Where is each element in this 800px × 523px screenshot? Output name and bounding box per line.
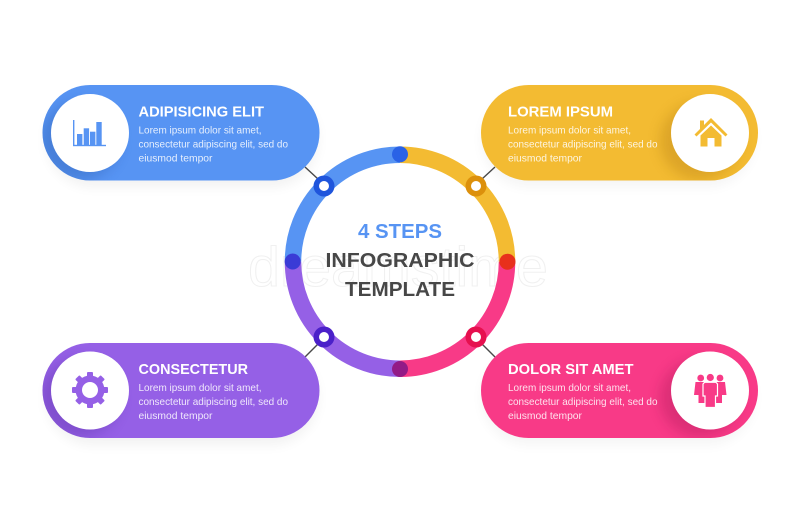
ring node: bottom left [314,326,334,348]
panel text: eiusmod tempor [138,410,213,422]
panel: lorem ipsum [481,85,758,187]
panel text: Lorem ipsum dolor sit amet, [138,124,262,136]
panel text: Lorem ipsum dolor sit amet, [508,382,631,394]
panel: consectetur [40,343,320,445]
panel text: consectetur adipiscing elit, sed do [508,138,658,150]
panel: dolor sit amet [481,343,758,445]
panel title: LOREM IPSUM [508,104,613,120]
ring node: bottom right [466,326,486,348]
icon: gear [72,372,108,408]
panel text: consectetur adipiscing elit, sed do [508,396,658,408]
heading: template: TEMPLATE [345,278,455,301]
icon: bar chart [73,120,106,146]
arc: purple [293,262,400,369]
panel text: eiusmod tempor [138,152,213,164]
icon: house [694,118,728,146]
panel text: Lorem ipsum dolor sit amet, [138,382,262,394]
icon: people [694,374,726,408]
panel text [508,124,658,164]
panel text: Lorem ipsum dolor sit amet, [508,124,631,136]
arc: blue [293,155,400,262]
ring junction dots [285,146,516,377]
panel text [508,382,658,422]
panel text [138,382,288,422]
panel text: consectetur adipiscing elit, sed do [138,396,288,408]
panel title: DOLOR SIT AMET [508,361,634,378]
watermark: dreamstime [248,235,548,298]
panel title: CONSECTETUR [138,361,248,378]
centre text [326,220,475,301]
heading: 4 steps: 4 STEPS [358,220,442,243]
arc: yellow [400,155,507,262]
ring node: top right [466,176,486,196]
heading: infographic: INFOGRAPHIC [326,249,475,272]
panel text: eiusmod tempor [508,152,582,164]
panel: adipisicing elit [40,85,320,187]
panel text [138,124,288,164]
ring node: top left [314,176,334,196]
panel text: consectetur adipiscing elit, sed do [138,138,288,150]
arc: pink [400,262,507,369]
ring: four coloured arcs [293,155,507,369]
connector lines [305,167,495,357]
panel title: ADIPISICING ELIT [138,104,264,120]
panel text: eiusmod tempor [508,410,582,422]
